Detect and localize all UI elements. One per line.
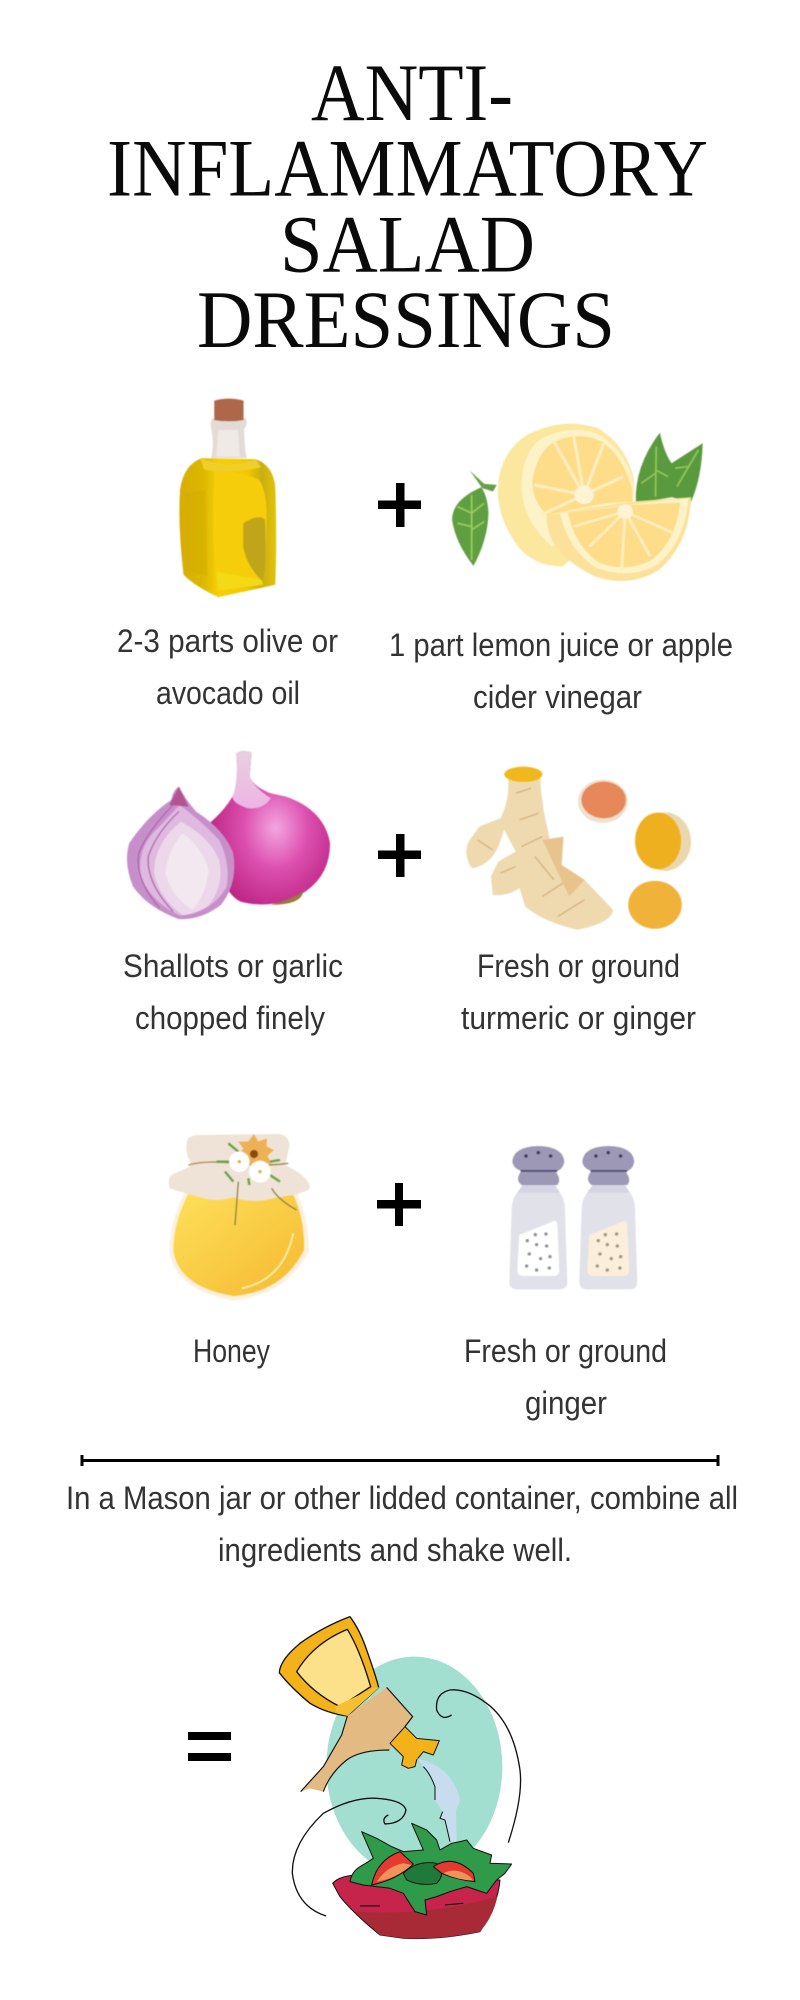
plus sign <box>377 1183 421 1226</box>
plus sign <box>378 483 421 527</box>
label: oil line two: avocado oil <box>156 675 300 711</box>
title: INFLAMMATORY <box>107 122 708 214</box>
icon: salt and pepper shakers <box>509 1146 637 1289</box>
instructions <box>66 1480 738 1568</box>
icon: dressing poured on salad <box>279 1617 521 1939</box>
panel: finishers <box>169 1134 667 1421</box>
title: DRESSINGS <box>197 274 615 365</box>
instructions: ingredients and shake well. <box>218 1532 572 1568</box>
title: SALAD <box>280 198 535 290</box>
label: ginger: Fresh or ground <box>464 1333 667 1369</box>
label: turmeric: Fresh or ground <box>477 948 680 984</box>
panel: oil <box>117 399 733 715</box>
icon: lemon <box>452 424 703 581</box>
icon: shallots <box>127 751 330 919</box>
icon: olive oil bottle <box>179 399 276 597</box>
label: honey: Honey <box>193 1333 270 1369</box>
equals sign <box>188 1732 231 1761</box>
icon: honey jar <box>169 1134 310 1301</box>
icon: turmeric and ginger <box>466 767 691 930</box>
title <box>107 47 708 365</box>
plus sign <box>378 834 421 877</box>
divider rule <box>82 1455 718 1466</box>
label: shallots line two: chopped finely <box>135 1000 325 1036</box>
label: lemon: 1 part lemon juice or apple <box>389 627 733 663</box>
label: turmeric line two: turmeric or ginger <box>461 1000 696 1036</box>
title: ANTI- <box>311 47 513 138</box>
label: lemon line two: cider vinegar <box>473 679 642 715</box>
panel: aromatics <box>123 751 696 1036</box>
label: shallots: Shallots or garlic <box>123 948 343 984</box>
label: ginger line two: ginger <box>525 1385 607 1421</box>
instructions: In a Mason jar or other lidded container, combine all <box>66 1480 738 1516</box>
label: oil: 2-3 parts olive or <box>117 623 338 659</box>
